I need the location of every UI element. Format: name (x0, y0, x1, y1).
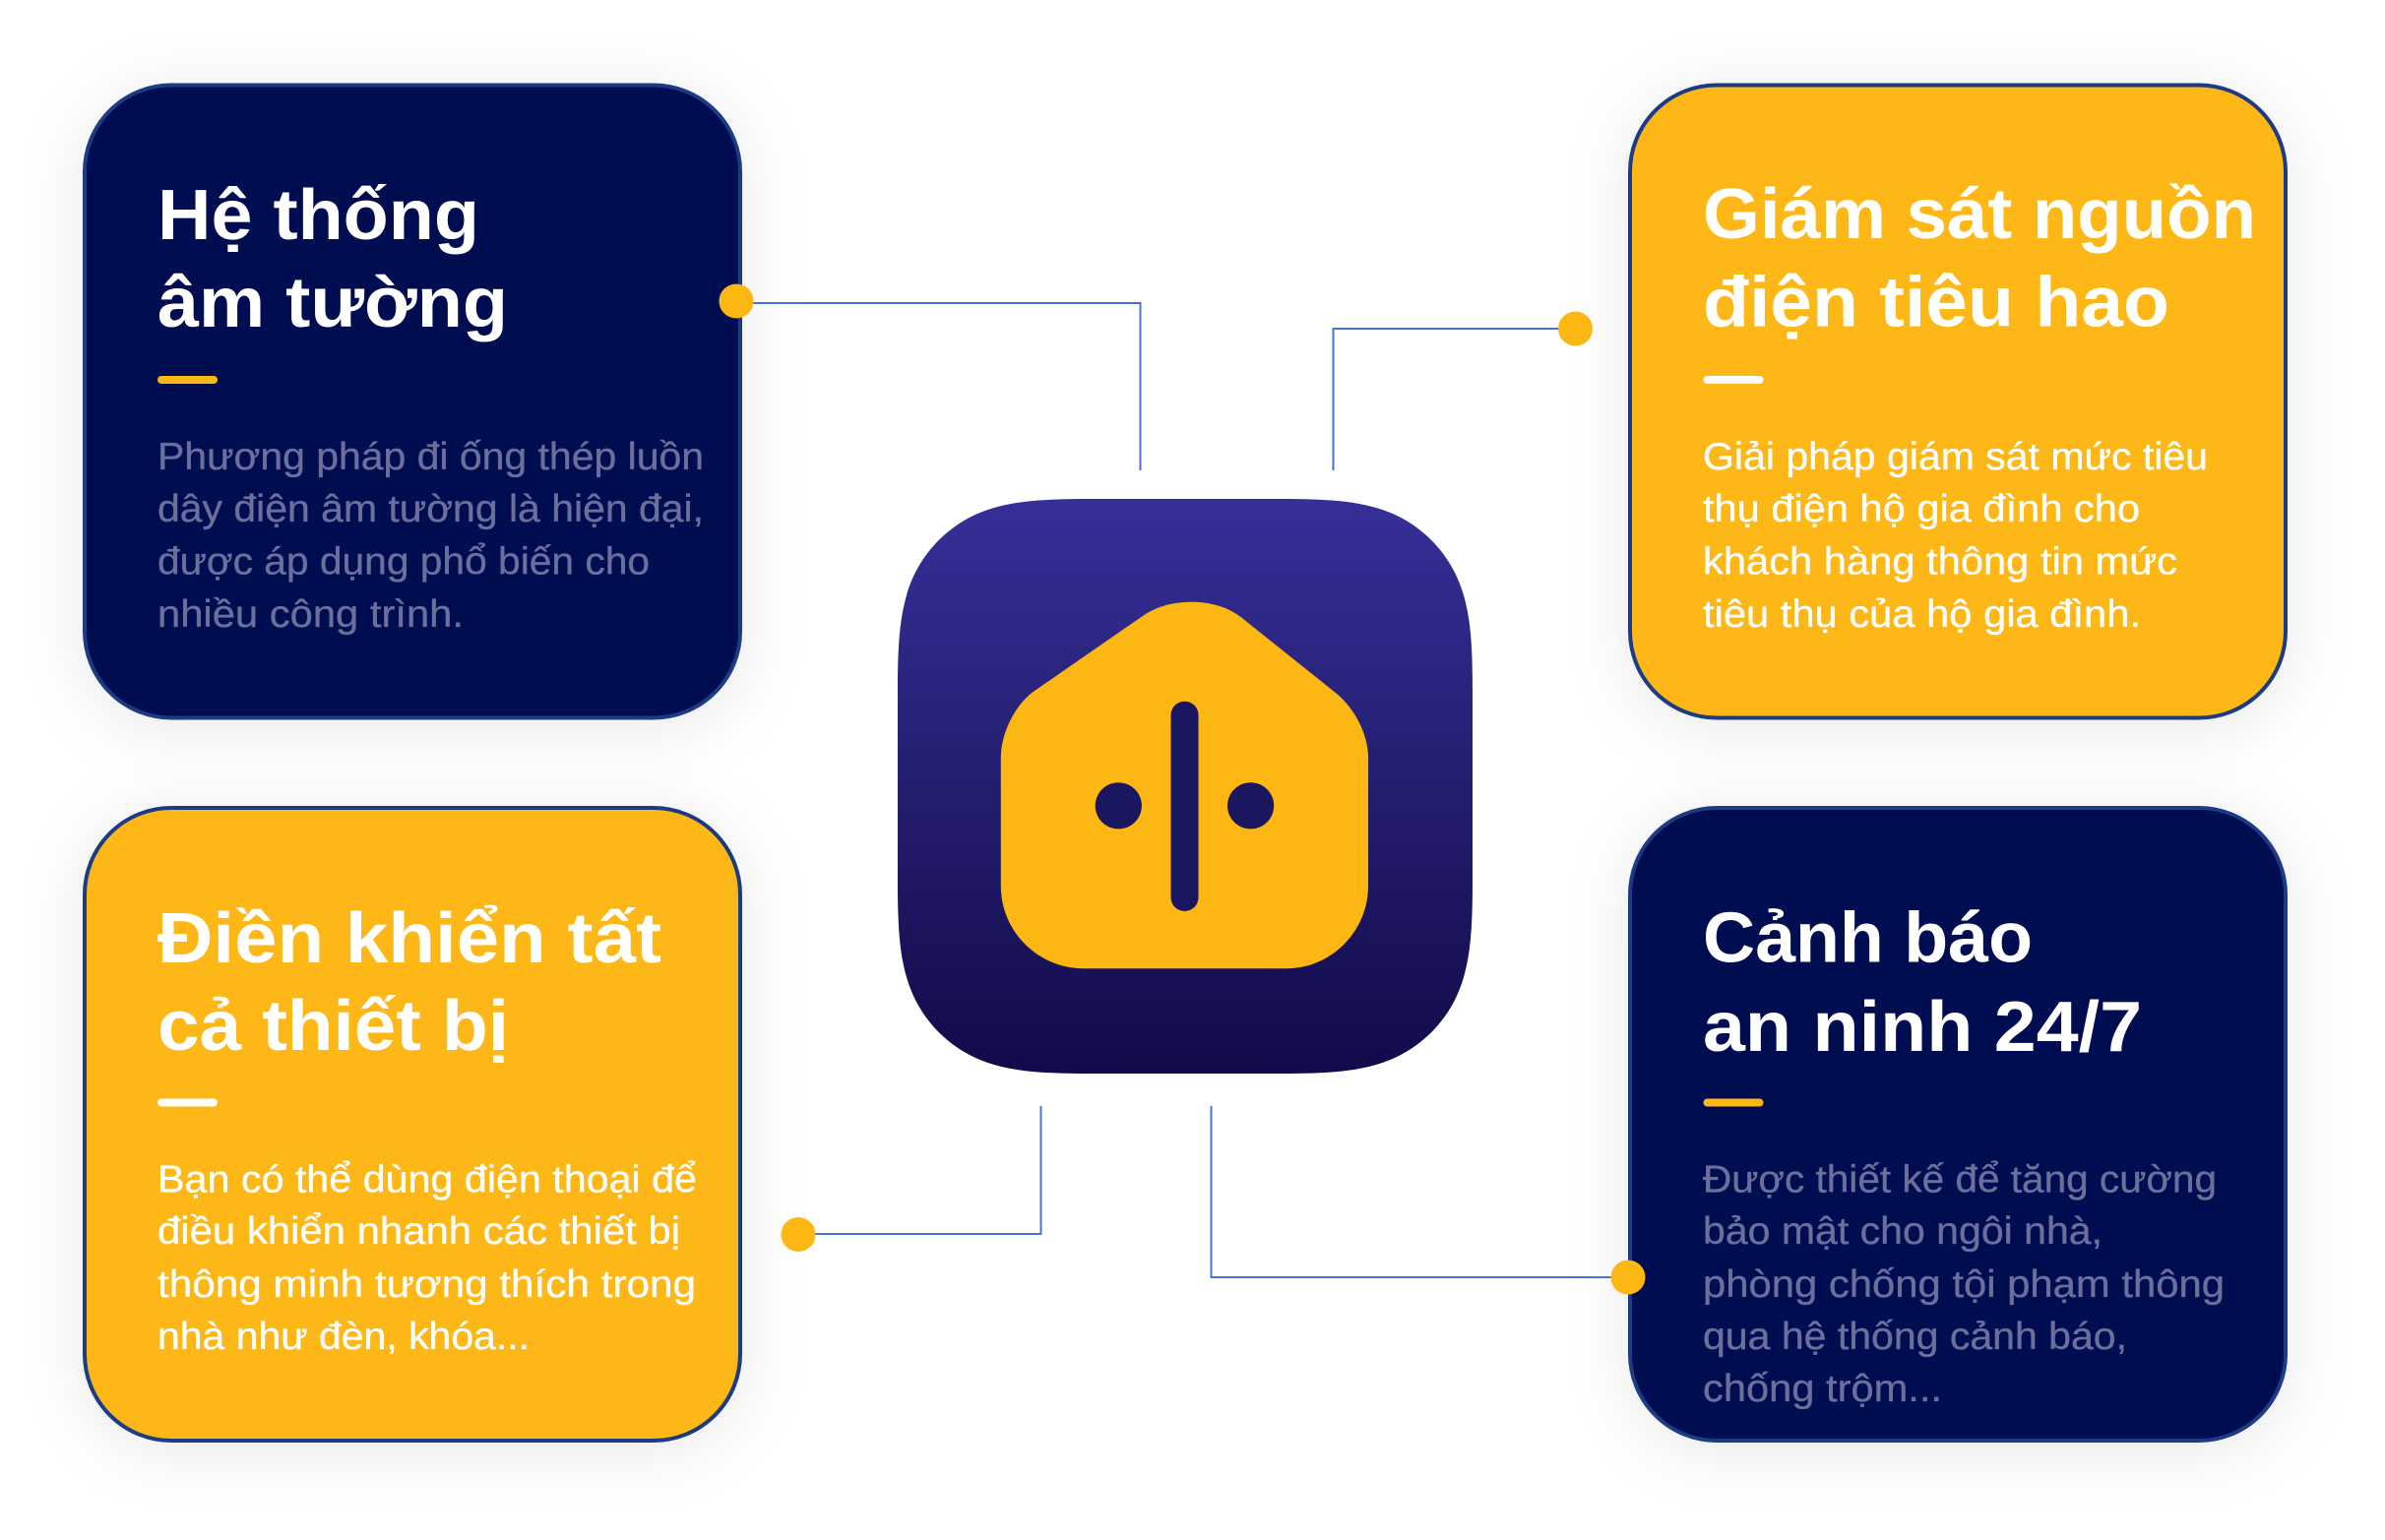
heading: dieu khien tat ca thiet bi: Điền khiển tất (157, 899, 661, 978)
connector: bottom right (1211, 1106, 1646, 1295)
heading: giam sat nguon dien tieu hao (1703, 175, 2256, 342)
text block: body: nhà như đèn, khóa... (157, 1316, 530, 1358)
connector: top left (719, 283, 1140, 470)
heading: dieu khien tat ca thiet bi: cả thiết bị (157, 987, 509, 1066)
text block: body: bảo mật cho ngôi nhà, (1703, 1210, 2103, 1253)
icon: divider bar (1171, 702, 1199, 911)
text block: body: Giải pháp giám sát mức tiêu (1703, 436, 2208, 478)
heading: he thong am tuong (157, 176, 508, 342)
text block: body: nhiều công trình. (157, 593, 464, 636)
accent bar (1703, 376, 1764, 384)
text block: body: phòng chống tội phạm thông (1703, 1263, 2225, 1306)
icon: right dot (1227, 782, 1274, 829)
accent bar (1703, 1098, 1764, 1106)
text block: body: khách hàng thông tin mức (1703, 541, 2177, 583)
icon: house (1001, 602, 1368, 968)
heading: he thong am tuong: âm tường (157, 264, 508, 342)
panel: canh bao an ninh 24/7 (1630, 808, 2286, 1441)
panel: he thong am tuong (85, 85, 740, 718)
text block: body (1703, 1159, 2225, 1410)
heading: giam sat nguon dien tieu hao: điện tiêu hao (1703, 264, 2169, 342)
accent bar (157, 376, 218, 384)
text block: body: tiêu thụ của hộ gia đình. (1703, 593, 2141, 636)
panel: dieu khien tat ca thiet bi (85, 808, 740, 1441)
connector: top right (1333, 311, 1593, 470)
text block: body: thụ điện hộ gia đình cho (1703, 488, 2140, 530)
text block: body: Bạn có thể dùng điện thoại để (157, 1159, 697, 1201)
connector: bottom left (782, 1106, 1041, 1252)
heading: dieu khien tat ca thiet bi (157, 899, 661, 1066)
heading: canh bao an ninh 24/7: Cảnh báo (1703, 899, 2033, 978)
text block: body: được áp dụng phổ biến cho (157, 541, 650, 583)
text block: body: qua hệ thống cảnh báo, (1703, 1316, 2127, 1358)
text block: body: dây điện âm tường là hiện đại, (157, 488, 704, 530)
icon: smart home app (898, 499, 1473, 1074)
text block: body: Được thiết kế để tăng cường (1703, 1159, 2217, 1201)
text block: body (157, 1159, 697, 1358)
text block: body: chống trộm... (1703, 1368, 1942, 1410)
icon: left dot (1096, 782, 1142, 829)
text block: body (157, 436, 704, 636)
heading: giam sat nguon dien tieu hao: Giám sát nguồn (1703, 175, 2256, 254)
heading: canh bao an ninh 24/7 (1703, 899, 2142, 1067)
text block: body: thông minh tương thích trong (157, 1263, 696, 1306)
text block: body: Phương pháp đi ống thép luồn (157, 436, 704, 478)
heading: canh bao an ninh 24/7: an ninh 24/7 (1703, 988, 2142, 1067)
text block: body: điều khiển nhanh các thiết bị (157, 1210, 680, 1253)
panel: giam sat nguon dien tieu hao (1630, 85, 2286, 718)
text block: body (1703, 436, 2208, 636)
heading: he thong am tuong: Hệ thống (157, 176, 479, 255)
accent bar (157, 1098, 218, 1106)
